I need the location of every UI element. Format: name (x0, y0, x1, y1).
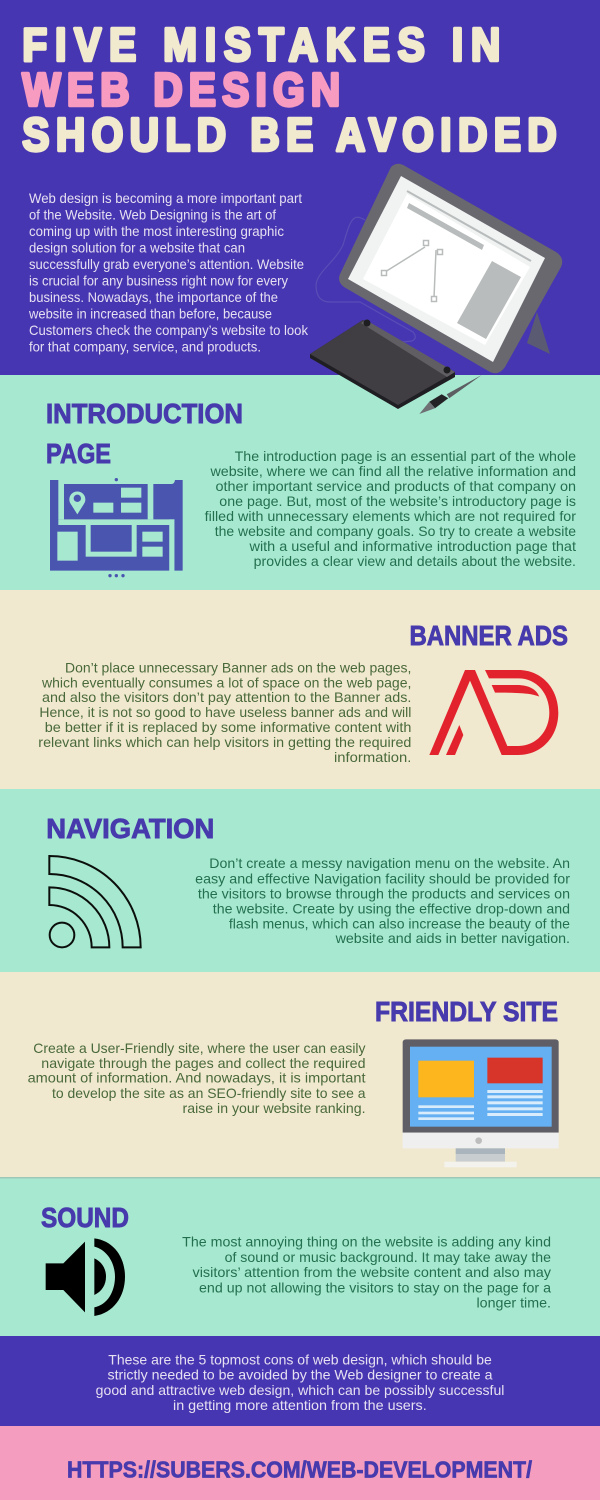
title (22, 20, 557, 161)
text block: closing summary: These are the 5 topmost cons of web design, which should be (108, 1352, 492, 1368)
panel: friendly site (0, 972, 600, 1177)
text block: friendly site: navigate through the pages and collect the required (41, 1055, 366, 1071)
text block: introduction (28, 190, 309, 354)
text block: banner ads: and also the visitors don’t pay attention to the Banner ads. (42, 689, 411, 705)
text block: banner ads: relevant links which can help visitors in getting the required (38, 734, 411, 750)
text block: banner ads: which eventually consumes a lot of space on the web page, (41, 674, 411, 690)
text block: navigation: website and aids in better navigation. (335, 930, 570, 946)
heading: sound: SOUND (41, 1202, 129, 1233)
panel: navigation (0, 789, 600, 972)
text block: introduction: business. Nowadays, the importance of the (29, 289, 278, 305)
text block: closing summary: in getting more attention from the users. (173, 1397, 427, 1413)
text block: friendly site: Create a User-Friendly site, where the user can easily (33, 1040, 366, 1056)
text block: introduction page (205, 448, 576, 569)
text block: introduction: for that company, service, and products. (29, 338, 261, 354)
text block: introduction page: filled with unnecessary elements which are not required for (205, 508, 576, 524)
text block: closing summary: strictly needed to be avoided by the Web designer to create a (108, 1367, 493, 1383)
icon: AD logo (429, 670, 558, 755)
text block: navigation: the website. Create by using the effective drop-down and (213, 900, 570, 916)
text block: introduction: Customers check the company’s website to look (29, 322, 309, 338)
icon: drawing tablet illustration (310, 164, 562, 414)
text block: friendly site: raise in your website ranking. (182, 1100, 366, 1116)
heading: introduction page: PAGE (46, 438, 111, 469)
text block: closing summary: good and attractive web design, which can be possibly successful (96, 1382, 504, 1398)
text block: friendly site (28, 1040, 366, 1116)
text block: introduction: is crucial for any business right now for every (29, 272, 288, 288)
text block: introduction page: the website and company goals. So try to create a website (215, 523, 576, 539)
text block: sound: The most annoying thing on the website is adding any kind (182, 1234, 551, 1250)
text block: sound: visitors’ attention from the website content and also may (192, 1264, 551, 1280)
icon: signal arcs (49, 856, 141, 947)
title: WEB DESIGN (22, 65, 340, 116)
panel: header (0, 0, 600, 375)
title: FIVE MISTAKES IN (22, 20, 500, 71)
text block: sound (182, 1234, 551, 1310)
text block: introduction page: one page. But, most of the website’s introductory page is (219, 493, 576, 509)
heading: introduction page: INTRODUCTION (46, 398, 243, 429)
text block: introduction: successfully grab everyone’s attention. Website (29, 256, 304, 272)
text block: friendly site: to develop the site as an SEO-friendly site to see a (52, 1085, 366, 1101)
panel: closing summary (0, 1336, 600, 1426)
panel: website link (0, 1426, 600, 1500)
heading: navigation: NAVIGATION (46, 813, 214, 844)
text block: introduction page: website, where we can find all the relative information and (209, 463, 576, 479)
icon: desktop monitor (403, 1039, 559, 1167)
text block: banner ads: Don’t place unnecessary Banner ads on the web pages, (65, 660, 411, 676)
text block: sound: end up not allowing the visitors to stay on the page for a (199, 1279, 551, 1295)
heading: introduction page (46, 398, 243, 469)
text block: banner ads: be better if it is replaced by some informative content with (45, 719, 411, 735)
text block: introduction page: with a useful and informative introduction page that (248, 538, 576, 554)
text block: navigation: Don’t create a messy navigation menu on the website. An (209, 855, 570, 871)
text block: introduction: of the Website. Web Designing is the art of (29, 206, 276, 222)
text block: banner ads (38, 660, 411, 765)
panel: banner ads (0, 590, 600, 789)
icon: website layout map (50, 478, 183, 577)
text block: navigation: flash menus, which can also increase the beauty of the (229, 915, 570, 931)
heading: friendly site: FRIENDLY SITE (375, 996, 558, 1027)
text block: introduction: website in increased than before, because (28, 306, 272, 322)
text block: navigation (195, 855, 570, 946)
text block: introduction page: The introduction page is an essential part of the whole (235, 448, 576, 464)
panel: sound (0, 1177, 600, 1336)
text block: navigation: the visitors to browse through the products and services on (198, 885, 570, 901)
text block: introduction page: provides a clear view and details about the website. (254, 553, 576, 569)
text block: friendly site: amount of information. And nowadays, it is important (28, 1070, 366, 1086)
text block: introduction page: other important service and products of that company on (216, 478, 576, 494)
text block: sound: longer time. (476, 1294, 551, 1310)
heading: banner ads: BANNER ADS (410, 620, 568, 651)
text block: navigation: easy and effective Navigation facility should be provided for (195, 870, 570, 886)
icon: speaker (46, 1238, 125, 1316)
text block: introduction: design solution for a website that can (29, 240, 245, 256)
text block: closing summary (96, 1352, 504, 1413)
title: SHOULD BE AVOIDED (22, 110, 557, 161)
text block: banner ads: Hence, it is not so good to have useless banner ads and will (39, 704, 411, 720)
text block: banner ads: information. (334, 749, 411, 765)
link text: HTTPS://SUBERS.COM/WEB-DEVELOPMENT/ (67, 1457, 533, 1483)
text block: introduction: coming up with the most interesting graphic (29, 223, 284, 239)
text block: sound: of sound or music background. It may take away the (225, 1249, 551, 1265)
text block: introduction: Web design is becoming a more important part (29, 190, 302, 206)
panel: introduction page (0, 375, 600, 590)
